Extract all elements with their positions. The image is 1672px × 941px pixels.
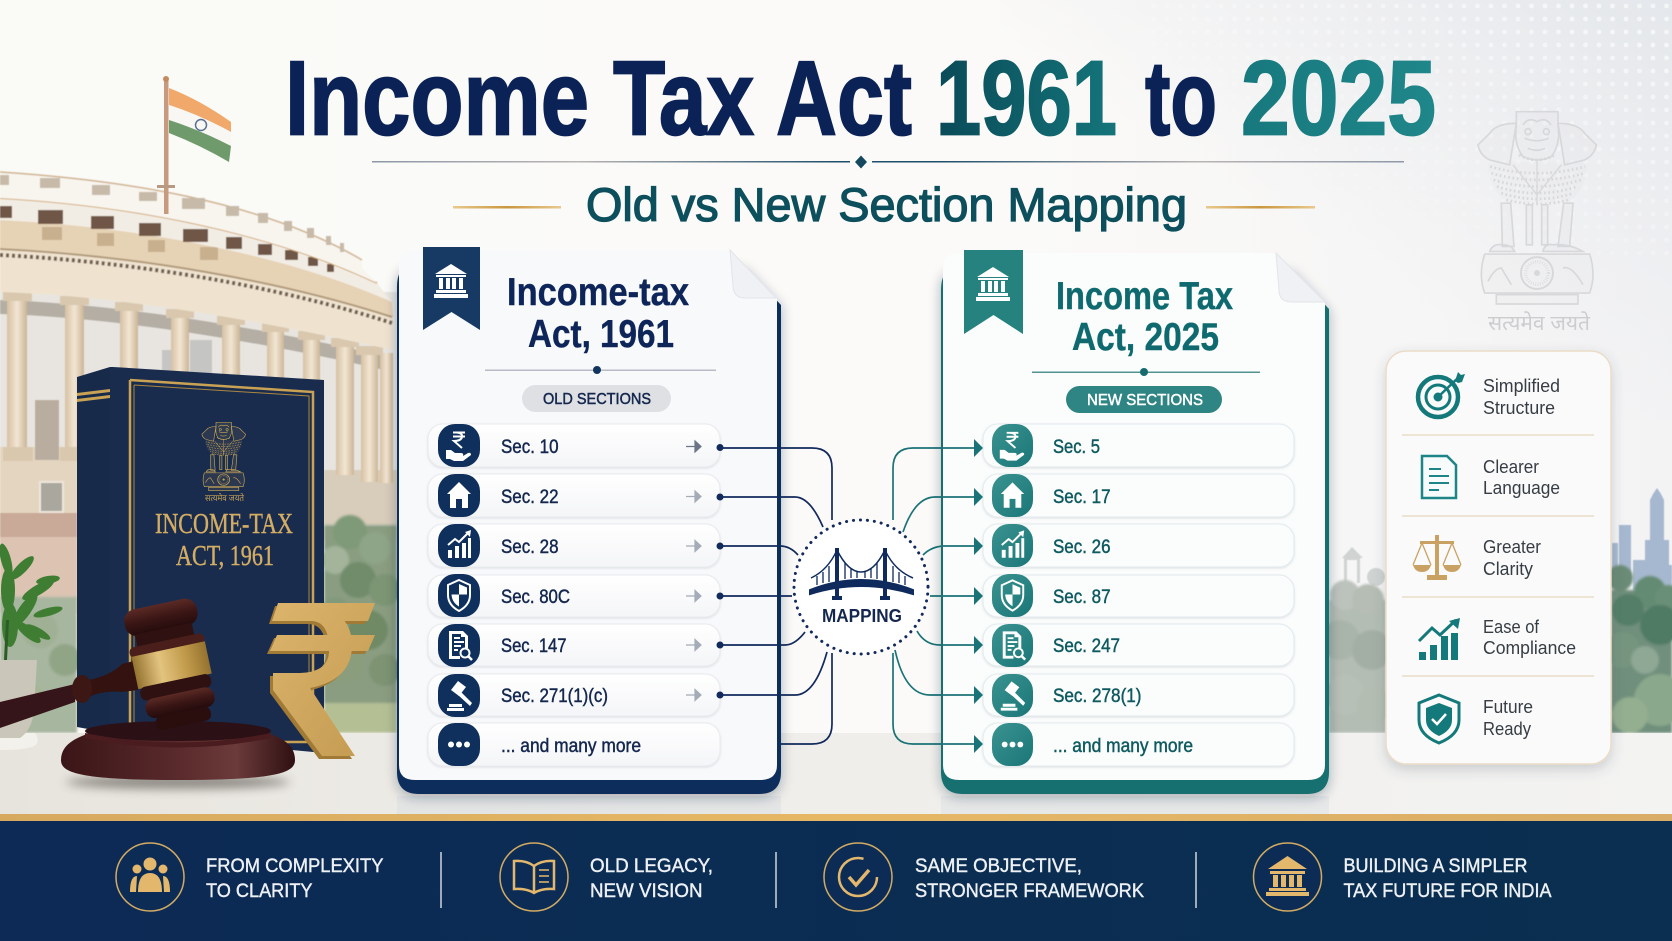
pill: new sections [1066,386,1222,413]
panel: benefits [1386,351,1611,764]
title: 1961 [936,40,1117,158]
illustration: gavel [0,596,295,789]
row: Sec. 147 [428,624,724,667]
card divider [1032,368,1260,376]
benefit: future ready: Future [1483,697,1533,717]
illustration: marble table [0,733,1672,814]
pill: old sections [522,385,671,412]
illustration: Parliament building [0,172,397,613]
row: and many more [428,723,720,766]
title: Tax [613,40,754,158]
item: complexity to clarity: FROM COMPLEXITY [206,856,384,877]
watermark motto: सत्यमेव जयते [1488,311,1591,335]
card back [941,270,1329,794]
item: simpler tax future: TAX FUTURE FOR INDIA [1344,881,1552,902]
mapping hub [794,520,928,654]
ribbon [964,250,1023,334]
row: and many more: ... and many more [501,736,641,757]
row: Sec. 5 [974,424,1294,467]
benefit: ease of compliance [1419,617,1576,660]
card title: Act, 1961 [528,313,674,356]
row: Sec. 26 [974,524,1294,567]
item: complexity to clarity: TO CLARITY [206,881,313,902]
icon: institution [976,267,1010,301]
row: and many more: ... and many more [1053,736,1193,757]
panel: old act card [397,247,781,794]
panel: new act card [941,250,1329,794]
book title [155,508,293,572]
page fold [730,250,776,298]
row: Sec. 80C: Sec. 80C [501,587,570,608]
book title: ACT, 1961 [176,540,274,572]
connector segments over the card edges [720,448,975,744]
benefit: greater clarity: Greater [1483,537,1541,557]
row: Sec. 271(1)(c): Sec. 271(1)(c) [501,686,608,707]
item: complexity to clarity [116,843,384,911]
book motto: सत्यमेव जयते [205,492,245,503]
footer banner [0,814,1672,941]
row: and many more [974,723,1294,766]
benefit: greater clarity [1413,535,1541,580]
frieze [0,220,393,317]
row: Sec. 87 [974,574,1294,617]
row: Sec. 17 [974,474,1294,517]
title: 2025 [1241,40,1436,158]
row: Sec. 22: Sec. 22 [501,487,558,508]
row: Sec. 80C [428,574,724,617]
illustration: golden rupee symbol [267,603,375,759]
row: Sec. 26: Sec. 26 [1053,537,1110,558]
icon: institution [434,264,468,298]
illustration: law book [77,367,324,753]
row: Sec. 147: Sec. 147 [501,636,566,657]
row: Sec. 271(1)(c) [428,674,724,717]
benefit: future ready [1419,695,1533,743]
icon: bridge [810,548,913,600]
item: simpler tax future: BUILDING A SIMPLER [1344,856,1528,877]
benefit: future ready: Ready [1483,719,1531,739]
title: Income [285,40,589,158]
ribbon [423,247,480,330]
illustration: card reflections on the table [397,796,1329,814]
benefit: clearer language: Language [1483,478,1560,498]
row: Sec. 22 [428,474,724,517]
card divider [485,366,716,374]
item: old legacy new vision [500,843,713,911]
row: Sec. 28 [428,524,724,567]
book title: INCOME-TAX [155,508,293,540]
title: Act [776,40,912,158]
card sheet [943,253,1325,780]
hub label: MAPPING [822,606,902,626]
card title: Act, 2025 [1072,316,1219,359]
card title: Income Tax [1056,275,1233,318]
pill: old sections: OLD SECTIONS [543,391,651,408]
benefit: simplified structure [1418,372,1560,418]
row: Sec. 5: Sec. 5 [1053,437,1100,458]
parapet [0,172,377,283]
row: Sec. 247: Sec. 247 [1053,636,1120,657]
row: Sec. 10: Sec. 10 [501,437,558,458]
row: Sec. 247 [974,624,1294,667]
benefit: ease of compliance: Ease of [1483,617,1540,637]
connectors: old sections to mapping hub [720,448,832,744]
card title: Income-tax [507,271,689,314]
benefit: clearer language: Clearer [1483,457,1539,477]
illustration: trees behind the book [0,515,401,733]
row: Sec. 87: Sec. 87 [1053,587,1110,608]
item: old legacy new vision: OLD LEGACY, [590,856,713,877]
title [285,40,1436,158]
page fold [1276,253,1325,302]
entablature [0,248,393,350]
pill: new sections: NEW SECTIONS [1087,392,1203,409]
benefit: simplified structure: Simplified [1483,376,1560,396]
row: Sec. 278(1) [974,674,1294,717]
benefit: clearer language [1422,456,1560,498]
illustration: flag [157,76,231,214]
columns [7,293,393,483]
title: to [1145,40,1217,158]
title divider [372,156,1404,168]
row: Sec. 10 [428,424,724,467]
background [1199,0,1672,416]
card title [1056,275,1233,359]
connectors: mapping hub to new sections [893,448,975,744]
illustration: right side trees and skyline [1320,488,1672,733]
card sheet [399,250,777,780]
benefit: ease of compliance: Compliance [1483,638,1576,658]
watermark: national emblem [1478,112,1596,335]
card title [507,271,689,356]
illustration: potted plant [0,542,64,750]
row: Sec. 278(1): Sec. 278(1) [1053,686,1142,707]
subtitle: Old vs New Section Mapping [586,178,1187,231]
item: same objective: STRONGER FRAMEWORK [915,881,1144,902]
benefit: greater clarity: Clarity [1483,559,1533,579]
item: same objective: SAME OBJECTIVE, [915,856,1082,877]
item: same objective [824,843,1144,911]
item: simpler tax future [1254,843,1552,911]
card back [397,267,781,794]
row: Sec. 28: Sec. 28 [501,537,558,558]
item: old legacy new vision: NEW VISION [590,881,702,902]
icon: book emblem [202,422,246,491]
row: Sec. 17: Sec. 17 [1053,487,1110,508]
attic [0,198,392,302]
benefit: simplified structure: Structure [1483,398,1555,418]
